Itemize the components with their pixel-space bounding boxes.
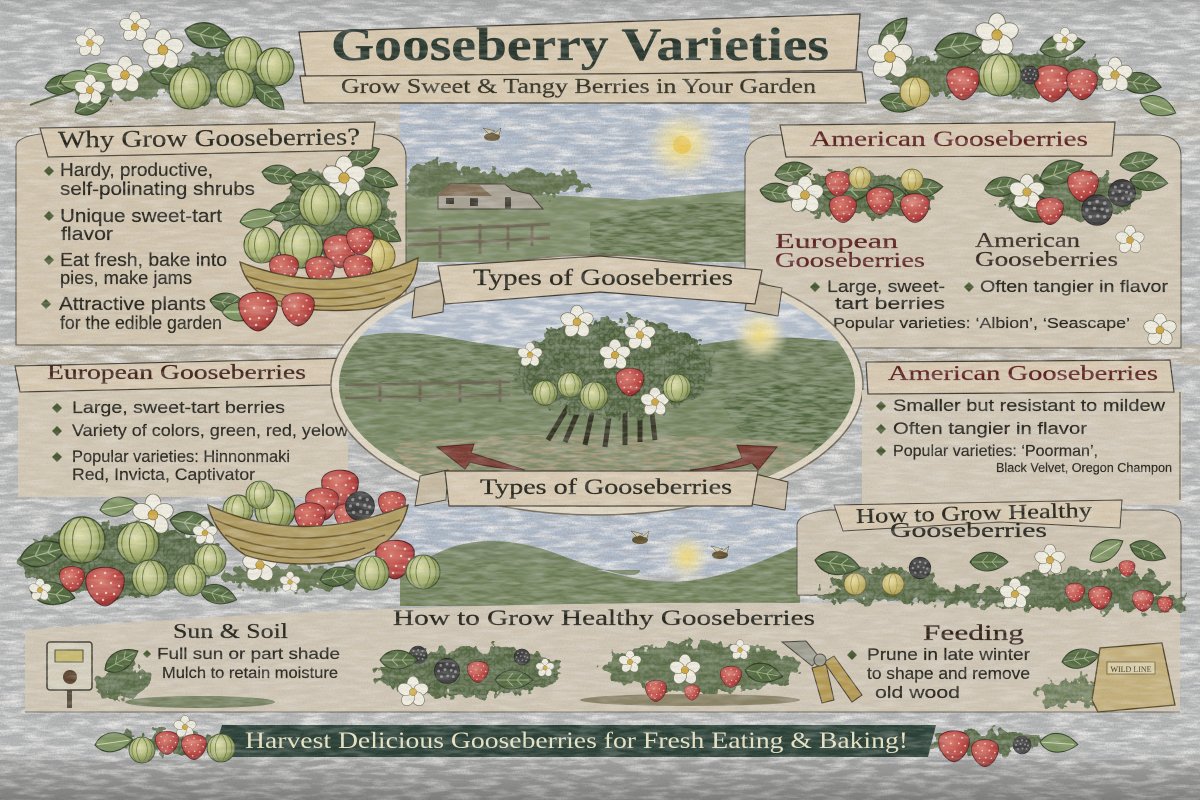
bullet list: european [52,398,349,484]
column heading: american: Gooseberries [975,247,1118,271]
heading ribbon: how to grow: How to Grow Healthy [856,498,1093,528]
bullet list: why grow: pies, make jams [60,268,192,288]
illustration: bush one [378,646,562,708]
bullet list: why grow: Attractive plants [59,294,206,314]
central oval scene [330,255,863,530]
illustration: small plants left [96,643,275,708]
heading ribbon: why grow [40,122,375,157]
subtitle ribbon [300,72,866,103]
heading ribbon: american middle: American Gooseberries [888,361,1158,385]
bush [517,305,713,447]
panel: lower basket garland [17,470,440,609]
bullet list: european: Red, Invicta, Captivator [72,465,255,484]
bullet list: american: Often tangier in flavor [893,419,1087,438]
heading ribbon: how to grow [834,498,1122,542]
farmhouse [436,184,543,209]
arrow: right [690,445,777,470]
title ribbon [299,14,860,80]
text: feeding: Prune in late winter [867,645,1030,664]
illustration: plant row [805,533,1185,612]
heading ribbon: why grow: Why Grow Gooseberries? [58,124,360,154]
text: feeding: to shape and remove [867,664,1030,683]
heading ribbon: how to grow: Gooseberries [890,518,1047,542]
top ribbon: types: Types of Gooseberries [473,265,733,290]
footer garland: left [94,715,235,763]
footer banner [212,725,936,757]
column heading: american: American [975,228,1081,252]
panel: how to grow healthy gooseberries right [797,498,1185,612]
icon: soil sign [47,642,92,708]
column heading: european: European [775,229,899,253]
bullet list: why grow: flavor [61,224,113,244]
bullet list: why grow: for the edible garden [60,313,222,333]
footer garland: right [930,731,1079,767]
text: sun and soil [143,646,340,682]
bottom ribbon: types [415,470,788,510]
heading ribbon: european [15,358,352,392]
bullet list: why grow: self-polinating shrubs [60,179,255,199]
illustration: berry sprigs [758,149,1178,347]
column heading: american [975,228,1118,271]
bullet list: european: Variety of colors, green, red, yelow [72,421,349,440]
heading ribbon: american middle [866,360,1174,394]
landscape: central farm [405,107,750,262]
column heading: european: Gooseberries [775,248,925,272]
sun [644,107,720,183]
bullet list: american: Popular varieties: ‘Poorman’, [893,443,1098,460]
text: feeding: old wood [875,683,960,702]
heading ribbon: european: European Gooseberries [47,360,306,384]
comparison text: tart berries [835,294,945,313]
text: feeding [847,645,1030,702]
illustration: bush two [580,640,800,706]
bullet list: why grow: Hardy, productive, [60,160,213,180]
arrow: left [437,444,525,470]
bullet list: european: Popular varieties: Hinnonmaki [72,447,290,466]
icon: fertilizer bag [1038,643,1175,712]
heading: how to grow: How to Grow Healthy Gooseberries [393,605,815,630]
panel: american gooseberries middle [862,360,1182,505]
garland: top left [30,11,294,120]
panel: american gooseberries top [745,122,1181,348]
comparison text: Often tangier in flavor [980,277,1168,296]
bottom ribbon: types: Types of Gooseberries [480,474,732,499]
bullet list: american [876,396,1172,475]
garland: top right [865,11,1179,121]
basket [208,470,408,564]
bee [483,128,501,141]
text: sun and soil: Mulch to retain moisture [162,665,338,682]
icon: pruning shears [782,641,862,703]
comparison text: Popular varieties: ‘Albion’, ‘Seascape’ [833,315,1130,332]
panel: why grow gooseberries [16,122,418,345]
panel: european gooseberries [15,358,352,497]
bullet list: why grow: Unique sweet-tart [60,206,222,226]
top ribbon: types [412,256,782,318]
heading: sun and soil: Sun & Soil [173,619,288,643]
panel: bottom grow strip [25,602,1180,712]
scene clipped in oval [339,292,855,507]
illustration: berry plant and basket [208,140,418,331]
heading: feeding: Feeding [923,620,1024,645]
bullet list: american: Smaller but resistant to mildew [893,396,1166,415]
footer text: Harvest Delicious Gooseberries for Fresh Eating & Baking! [245,728,908,753]
comparison text: Large, sweet- [827,277,945,296]
bullet list: european: Large, sweet-tart berries [72,398,285,417]
heading ribbon: american top [780,122,1115,157]
column heading: european [775,229,925,272]
landscape: lower valley [400,531,800,606]
title: Gooseberry Varieties [331,19,829,71]
text: sun and soil: Full sun or part shade [157,646,340,663]
icon: fertilizer bag: WILD LINE [1110,665,1152,674]
fence [408,224,550,258]
comparison text [810,277,1168,332]
subtitle: Grow Sweet & Tangy Berries in Your Garden [341,74,817,98]
bullet list: why grow [41,160,255,333]
bullet list: american: Black Velvet, Oregon Champon [996,460,1172,475]
heading ribbon: american top: American Gooseberries [810,126,1088,151]
bullet list: why grow: Eat fresh, bake into [60,250,227,270]
